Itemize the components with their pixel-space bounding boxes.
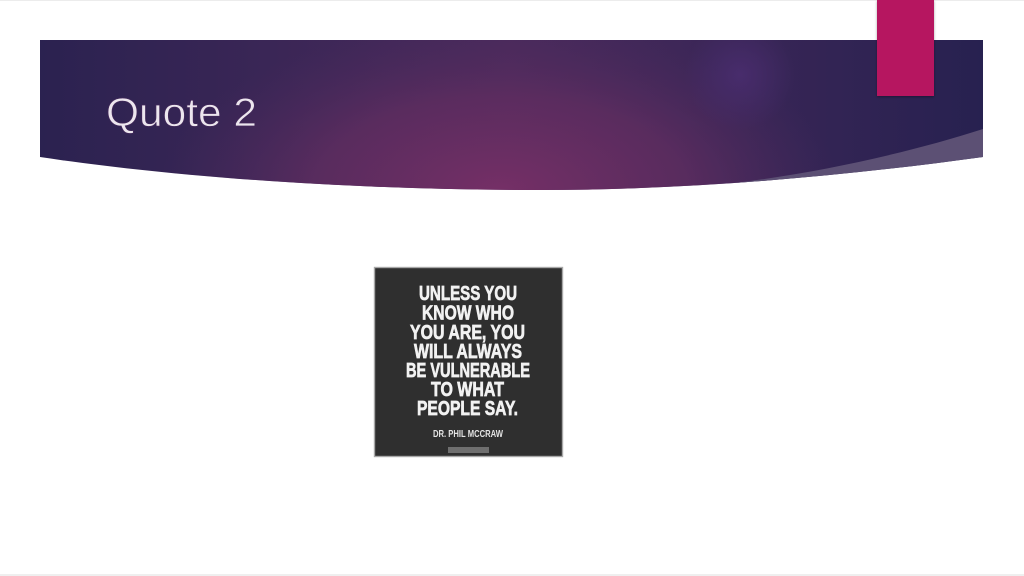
banner highlight swoosh	[736, 129, 983, 183]
watermark bar	[448, 447, 489, 453]
image background	[374, 268, 562, 456]
header banner	[40, 40, 983, 192]
quote text: BE VULNERABLE	[406, 360, 530, 382]
quote text: UNLESS YOU	[419, 283, 517, 305]
quote text: WILL ALWAYS	[414, 341, 522, 363]
pink bookmark tab	[877, 0, 934, 96]
quote image	[374, 268, 562, 456]
title: Quote 2	[106, 91, 257, 135]
quote text: YOU ARE, YOU	[410, 322, 525, 344]
quote attribution: DR. PHIL MCCRAW	[433, 429, 503, 440]
quote text: PEOPLE SAY.	[417, 398, 518, 420]
quote text: TO WHAT	[431, 379, 504, 401]
quote text	[406, 283, 530, 420]
quote text: KNOW WHO	[422, 302, 514, 324]
